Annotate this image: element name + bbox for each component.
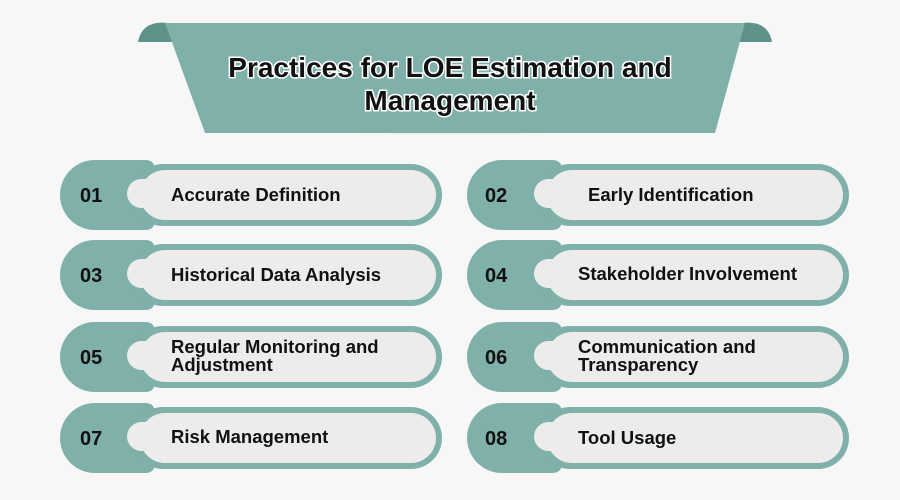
card 04: Stakeholder Involvement (578, 263, 797, 284)
card 06: Transparency (578, 354, 699, 375)
card 03: Historical Data Analysis (171, 264, 381, 285)
card 04: 04 (485, 265, 508, 287)
card 03 (60, 240, 442, 310)
title banner (138, 23, 772, 158)
card 03: 03 (80, 265, 102, 287)
card 08: Tool Usage (578, 427, 676, 448)
card 02 (467, 160, 849, 230)
card 05: Regular Monitoring and (171, 336, 379, 357)
card 04 (467, 240, 849, 310)
card 01: Accurate Definition (171, 184, 341, 205)
title: Practices for LOE Estimation and (228, 52, 672, 83)
card 07: Risk Management (171, 426, 328, 447)
card 08 (467, 403, 849, 473)
card 06: Communication and (578, 336, 756, 357)
card 05: 05 (80, 347, 102, 369)
card 01 (60, 160, 442, 230)
card 02: Early Identification (588, 184, 754, 205)
card 06: 06 (485, 347, 507, 369)
card 02: 02 (485, 185, 507, 207)
card 07: 07 (80, 428, 102, 450)
card 05 (60, 322, 442, 392)
card 08: 08 (485, 428, 507, 450)
card 06 (467, 322, 849, 392)
title banner: Management (364, 85, 536, 116)
card 07 (60, 403, 442, 473)
card 01: 01 (80, 185, 102, 207)
card 05: Adjustment (171, 354, 273, 375)
